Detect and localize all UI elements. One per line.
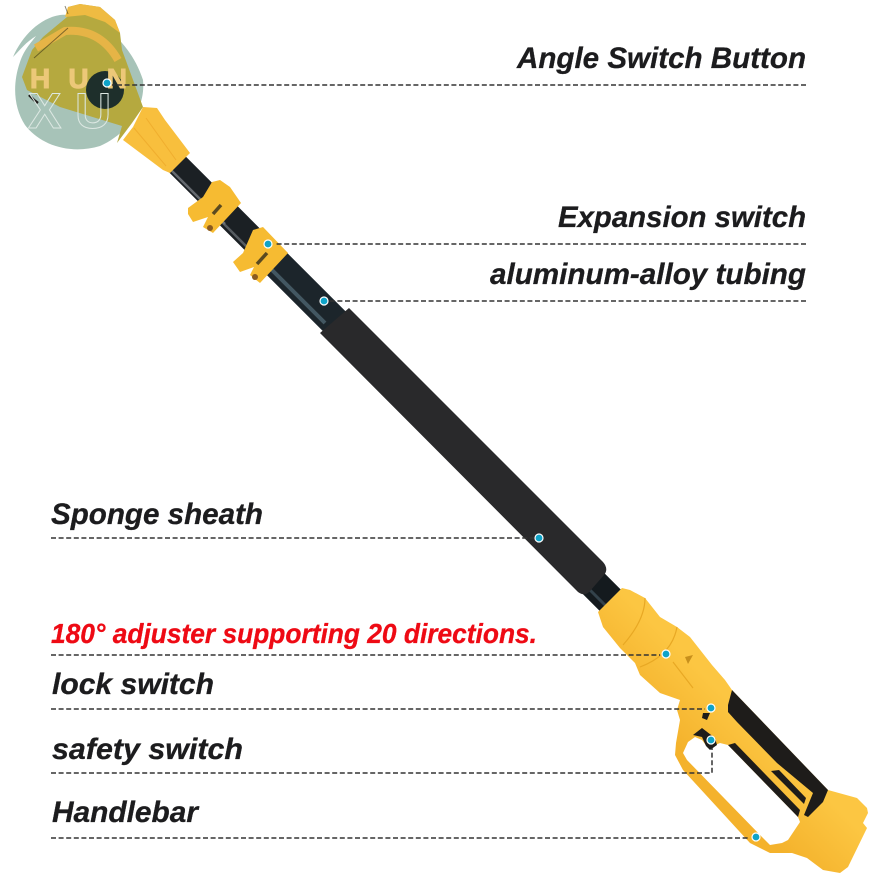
callout: 180 degree adjuster: 180° adjuster supporting 20 directions. xyxy=(51,618,537,649)
logo text XU: XU xyxy=(28,83,111,139)
head neck xyxy=(123,107,190,173)
callout: Angle Switch Button: Angle Switch Button xyxy=(516,42,806,75)
sponge sheath xyxy=(320,308,606,594)
inner grip strip xyxy=(728,743,800,817)
callout: safety switch: safety switch xyxy=(52,733,243,766)
safety switch trigger xyxy=(693,728,717,750)
aluminum-alloy tube xyxy=(170,163,613,606)
callout: 180 degree adjuster xyxy=(51,618,670,658)
black grip xyxy=(728,690,828,817)
head highlight arc xyxy=(36,31,118,60)
callout: Expansion switch: Expansion switch xyxy=(558,201,806,234)
callout: Expansion switch xyxy=(264,201,806,248)
product: telescopic pole tool xyxy=(123,107,868,873)
callout: lock switch: lock switch xyxy=(52,668,214,701)
black button xyxy=(86,71,124,109)
lock switch slot xyxy=(702,713,710,720)
watermark logo with tool head xyxy=(13,4,143,149)
handle body xyxy=(598,588,868,873)
callout: safety switch xyxy=(51,733,715,773)
callout: Sponge sheath xyxy=(51,498,543,542)
head top yellow cap xyxy=(65,4,120,33)
callout: aluminum-alloy tubing xyxy=(320,258,806,305)
lower expansion clamp xyxy=(233,227,288,283)
head bottom nub xyxy=(29,95,38,103)
callout: aluminum-alloy tubing: aluminum-alloy tubing xyxy=(490,258,806,291)
tool head xyxy=(22,4,143,143)
callout: Sponge sheath: Sponge sheath xyxy=(51,498,263,531)
logo text HUN: HUN xyxy=(30,63,127,94)
sage circle xyxy=(13,15,143,149)
adjuster seam xyxy=(623,598,693,688)
grip slot xyxy=(771,770,806,804)
callout: lock switch xyxy=(51,668,715,712)
upper expansion clamp xyxy=(188,180,241,233)
callout: Handlebar xyxy=(51,796,760,841)
callout: Handlebar: Handlebar xyxy=(52,796,200,829)
head edge lines xyxy=(34,6,68,58)
adjuster notch xyxy=(685,655,693,664)
callout: Angle Switch Button xyxy=(103,42,806,87)
